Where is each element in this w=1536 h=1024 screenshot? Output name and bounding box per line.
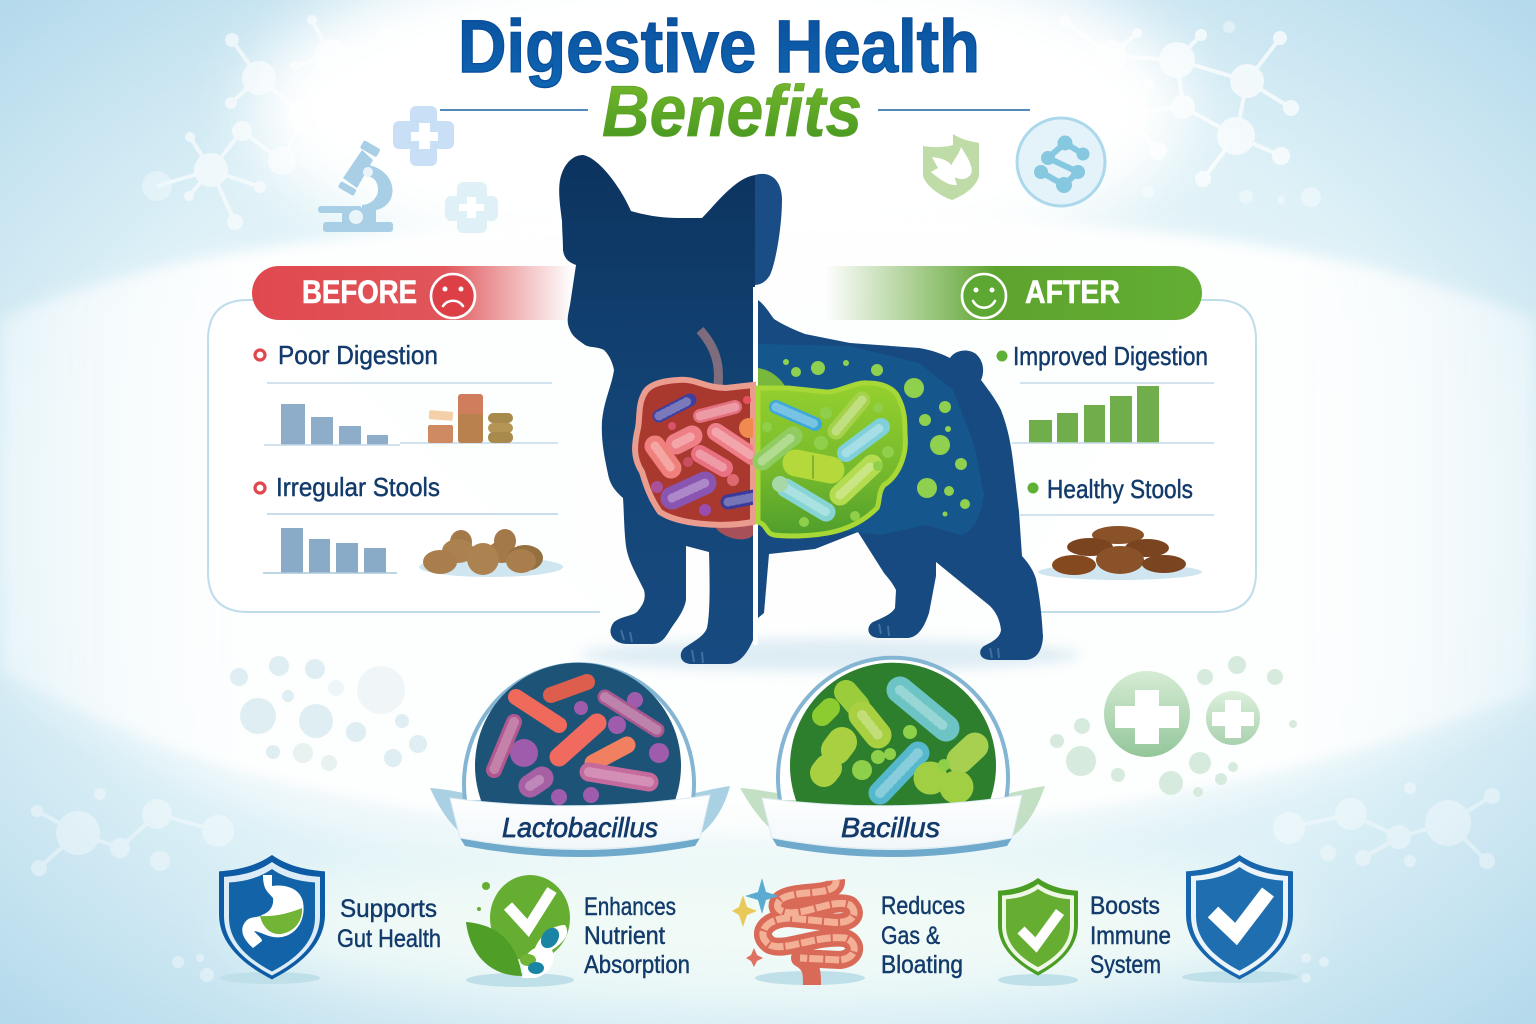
benefit: supports gut health: Supports	[340, 895, 437, 923]
dog left half: before	[559, 155, 755, 664]
irregular stools item	[255, 472, 558, 514]
stomach: after	[758, 368, 905, 536]
icon: irregular stool blocks	[428, 394, 513, 443]
poor digestion item	[255, 340, 552, 383]
icon: sparkles	[732, 878, 779, 967]
icon: healthy stools	[1038, 526, 1202, 580]
benefit: reduces gas and bloating	[732, 878, 965, 985]
dog right half: after	[758, 300, 1043, 660]
benefit: supports gut health: Gut Health	[337, 925, 441, 953]
irregular stools item: Irregular Stools	[276, 472, 440, 502]
icon: medical crosses	[393, 106, 498, 233]
benefit: boosts immune system: System	[1090, 951, 1161, 979]
healthy stools item: Healthy Stools	[1047, 474, 1193, 504]
benefit: reduces gas and bloating: Gas &	[881, 922, 940, 950]
icon: intestines	[763, 880, 854, 985]
bar chart: poor digestion	[264, 404, 558, 445]
icon: stomach shield	[219, 855, 325, 979]
paw toe lines	[621, 624, 999, 663]
benefit: enhances nutrient absorption: Absorption	[584, 951, 690, 979]
before label pill	[252, 266, 572, 320]
healthy stools item	[1020, 474, 1214, 515]
ribbon: bacillus: Bacillus	[841, 812, 940, 843]
after label pill: AFTER	[1025, 274, 1120, 310]
badge: bacillus	[740, 658, 1045, 857]
benefit: boosts immune system: Boosts	[1090, 892, 1160, 920]
ribbon: bacillus	[762, 795, 1022, 857]
benefit: enhances nutrient absorption	[466, 875, 690, 987]
divider line	[753, 287, 758, 645]
icon: leaf check	[466, 875, 570, 978]
bar chart: improved digestion	[1012, 386, 1214, 443]
benefit: boosts immune system: Immune	[1090, 922, 1171, 950]
ribbon: lactobacillus	[450, 795, 710, 857]
floating probiotics	[783, 359, 970, 516]
ribbon: lactobacillus: Lactobacillus	[502, 812, 658, 843]
icon: sad face	[431, 274, 475, 318]
title	[458, 5, 980, 152]
icon: molecule circle	[1017, 118, 1105, 206]
poor digestion item: Poor Digestion	[278, 340, 438, 370]
benefit: enhances nutrient absorption: Nutrient	[584, 922, 665, 950]
panel: before	[208, 266, 600, 612]
panel: after	[825, 266, 1256, 612]
before label pill: BEFORE	[302, 274, 417, 310]
icon: microscope	[318, 140, 393, 232]
benefit: reduces gas and bloating: Bloating	[881, 951, 963, 979]
improved digestion item	[996, 341, 1214, 383]
benefit: supports gut health	[219, 855, 441, 984]
icon: happy face	[962, 274, 1006, 318]
icon: green shield	[998, 878, 1078, 976]
benefit: enhances nutrient absorption: Enhances	[584, 893, 676, 921]
heading: Benefits: Benefits	[602, 72, 862, 152]
dog silhouette	[559, 155, 1080, 671]
stomach: before	[635, 380, 764, 539]
improved digestion item: Improved Digestion	[1013, 341, 1208, 371]
benefit: boosts immune system	[998, 855, 1298, 986]
icon: health crosses right	[1104, 671, 1260, 757]
icon: blue shield	[1182, 855, 1298, 983]
icon: stool lumps	[419, 529, 563, 577]
bar chart: irregular stools	[263, 528, 397, 573]
dog right ear	[755, 174, 782, 285]
esophagus	[700, 330, 718, 385]
gut flora patch	[758, 344, 984, 535]
benefit: reduces gas and bloating: Reduces	[881, 892, 965, 920]
after label pill	[825, 266, 1202, 320]
badge: lactobacillus	[430, 663, 730, 857]
icon: faint leaf shield	[923, 134, 979, 200]
heading: Digestive Health: Digestive Health	[458, 5, 980, 88]
